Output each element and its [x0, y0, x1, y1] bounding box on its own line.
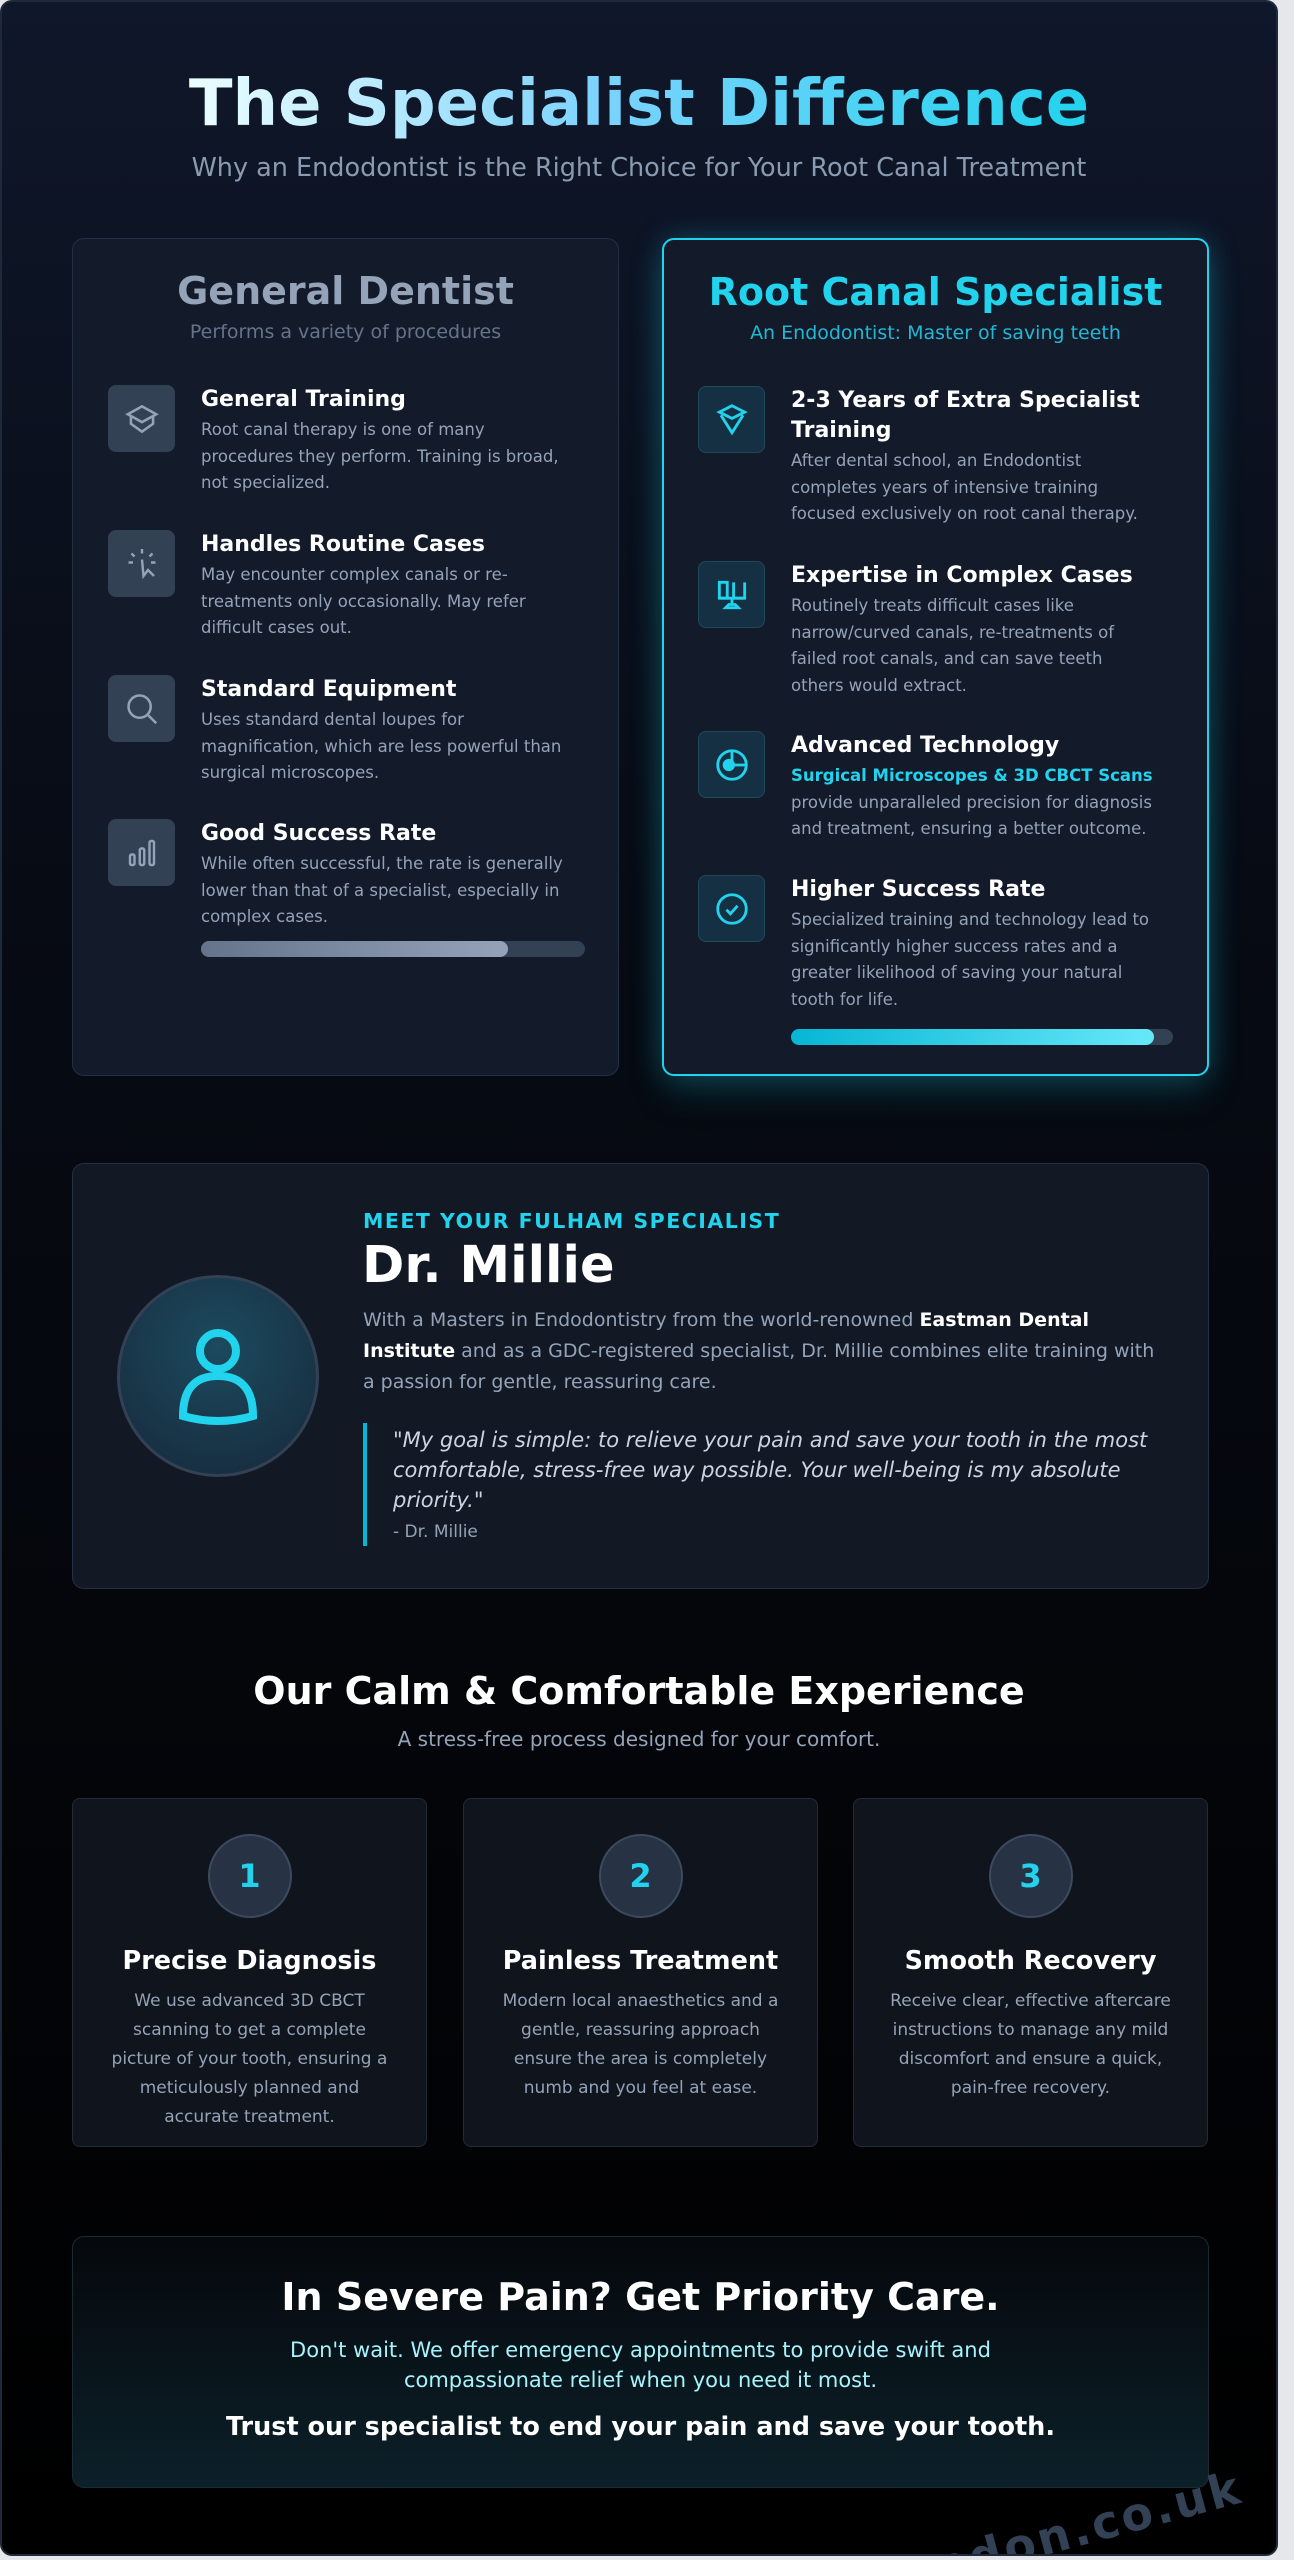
bio text: With a Masters in Endodontistry from the world-renowned Eastman Dental Institute and as a GDC-registered specialist, Dr. Millie combines elite training with a passion for gentle, reassuring care. — [363, 1309, 1154, 1393]
item: complex cases — [698, 561, 1133, 694]
icon: magnifier — [108, 675, 175, 742]
progress bar: specialist — [791, 1029, 1173, 1045]
item: general training: procedures they perform. Training is broad, — [201, 446, 559, 466]
panel: meet specialist — [72, 1163, 1209, 1589]
item: standard equipment: magnification, which are less powerful than — [201, 736, 561, 756]
icon: cursor click — [108, 530, 175, 597]
item: extra training: completes years of intensive training — [791, 478, 1098, 496]
item: higher success rate: significantly higher success rates and a — [791, 936, 1118, 956]
CTA text: Don't wait. We offer emergency appointments to provide swift and — [290, 2338, 991, 2362]
item: higher success rate: tooth for life. — [791, 990, 898, 1008]
item: complex cases: narrow/curved canals, re-treatments of — [791, 622, 1114, 642]
progress bar: general — [201, 941, 585, 957]
step 3: Receive clear, effective aftercare instructions to manage any mild discomfort and ensure a quick, pain-free recovery. — [890, 1991, 1171, 2098]
icon: monitor — [698, 561, 765, 628]
item: complex cases: failed root canals, and can save teeth — [791, 649, 1102, 668]
subheading: experience: A stress-free process designed for your comfort. — [398, 1727, 880, 1751]
heading: specialist: Root Canal Specialist — [709, 270, 1162, 314]
icon: scan target — [698, 731, 765, 798]
step 2: Painless Treatment — [503, 1946, 778, 1976]
item: good success rate: While often successful, the rate is generally — [201, 854, 563, 873]
icon: bar chart — [108, 819, 175, 886]
step 1: We use advanced 3D CBCT scanning to get a complete picture of your tooth, ensuring a meticulously planned and accurate treatment. — [112, 1991, 387, 2127]
icon: check circle — [698, 875, 765, 942]
panel: general dentist — [72, 238, 619, 1076]
panel: root canal specialist — [662, 238, 1209, 1076]
item: advanced technology — [698, 731, 1153, 838]
item: routine cases: May encounter complex canals or re- — [201, 565, 508, 584]
item: general training: General Training — [201, 387, 406, 412]
icon: graduation cap — [108, 385, 175, 452]
item: good success rate — [108, 819, 585, 957]
subheading: An Endodontist: Master of saving teeth — [750, 322, 1121, 344]
step 2 — [463, 1798, 818, 2147]
quote: "My goal is simple: to relieve your pain and save your tooth in the most comfortable, stress-free way possible. Your well-being is my absolute priority." — [393, 1428, 1147, 1512]
CTA heading: In Severe Pain? Get Priority Care. — [281, 2275, 1000, 2319]
item: advanced technology: Advanced Technology — [791, 733, 1059, 758]
item: standard equipment: surgical microscopes. — [201, 763, 379, 782]
item: higher success rate: Specialized training and technology lead to — [791, 910, 1149, 929]
item: higher success rate: Higher Success Rate — [791, 877, 1045, 902]
item: complex cases: others would extract. — [791, 676, 967, 694]
title: The Specialist Difference — [189, 67, 1089, 141]
item: higher success rate — [698, 875, 1173, 1045]
item: higher success rate: greater likelihood of saving your natural — [791, 963, 1122, 982]
item: routine cases: treatments only occasionally. May refer — [201, 592, 526, 610]
item: extra training: After dental school, an Endodontist — [791, 451, 1081, 470]
step 1: Precise Diagnosis — [123, 1946, 376, 1976]
item: routine cases — [108, 530, 526, 637]
quote: - Dr. Millie — [393, 1522, 478, 1542]
step 2: Modern local anaesthetics and a gentle, reassuring approach ensure the area is completely numb and you feel at ease. — [503, 1991, 778, 2098]
item: standard equipment: Standard Equipment — [201, 677, 456, 702]
item: general training — [108, 385, 559, 492]
quote — [363, 1423, 1173, 1546]
subheading: Performs a variety of procedures — [190, 321, 501, 343]
item: general training: not specialized. — [201, 473, 330, 492]
step 1: 1 — [238, 1857, 261, 1895]
item: extra training — [698, 386, 1140, 523]
heading: Dr. Millie: Dr. Millie — [362, 1236, 615, 1295]
item: advanced technology: and treatment, ensuring a better outcome. — [791, 819, 1147, 838]
item: advanced technology: provide unparalleled precision for diagnosis — [791, 792, 1152, 812]
icon: shield cap — [698, 386, 765, 453]
item: good success rate: lower than that of a specialist, especially in — [201, 880, 559, 900]
step 3: 3 — [1019, 1857, 1042, 1895]
item: extra training: Training — [791, 418, 891, 443]
item: standard equipment — [108, 675, 561, 782]
step 1 — [72, 1798, 427, 2147]
subtitle: Why an Endodontist is the Right Choice for Your Root Canal Treatment — [192, 153, 1086, 183]
item: advanced technology: Surgical Microscopes & 3D CBCT Scans — [791, 766, 1153, 785]
step 2: 2 — [629, 1857, 652, 1895]
heading: experience: Our Calm & Comfortable Experience — [253, 1669, 1025, 1713]
CTA text: compassionate relief when you need it most. — [404, 2368, 877, 2392]
item: extra training: focused exclusively on root canal therapy. — [791, 504, 1138, 523]
label: meet your specialist: MEET YOUR FULHAM SPECIALIST — [363, 1209, 780, 1233]
icon: avatar — [117, 1275, 319, 1477]
panel: priority care CTA — [72, 2236, 1209, 2488]
step 3 — [853, 1798, 1208, 2147]
item: good success rate: Good Success Rate — [201, 821, 436, 846]
item: good success rate: complex cases. — [201, 907, 328, 926]
item: complex cases: Expertise in Complex Cases — [791, 563, 1133, 588]
CTA text — [290, 2338, 991, 2392]
item: routine cases: Handles Routine Cases — [201, 532, 485, 557]
heading: general dentist: General Dentist — [177, 269, 514, 313]
item: general training: Root canal therapy is one of many — [201, 420, 485, 439]
CTA bold line: Trust our specialist to end your pain and save your tooth. — [226, 2412, 1055, 2442]
item: routine cases: difficult cases out. — [201, 618, 352, 637]
step 3: Smooth Recovery — [905, 1946, 1156, 1976]
item: standard equipment: Uses standard dental loupes for — [201, 710, 464, 729]
item: complex cases: Routinely treats difficult cases like — [791, 596, 1074, 615]
item: extra training: 2-3 Years of Extra Specialist — [791, 388, 1140, 413]
